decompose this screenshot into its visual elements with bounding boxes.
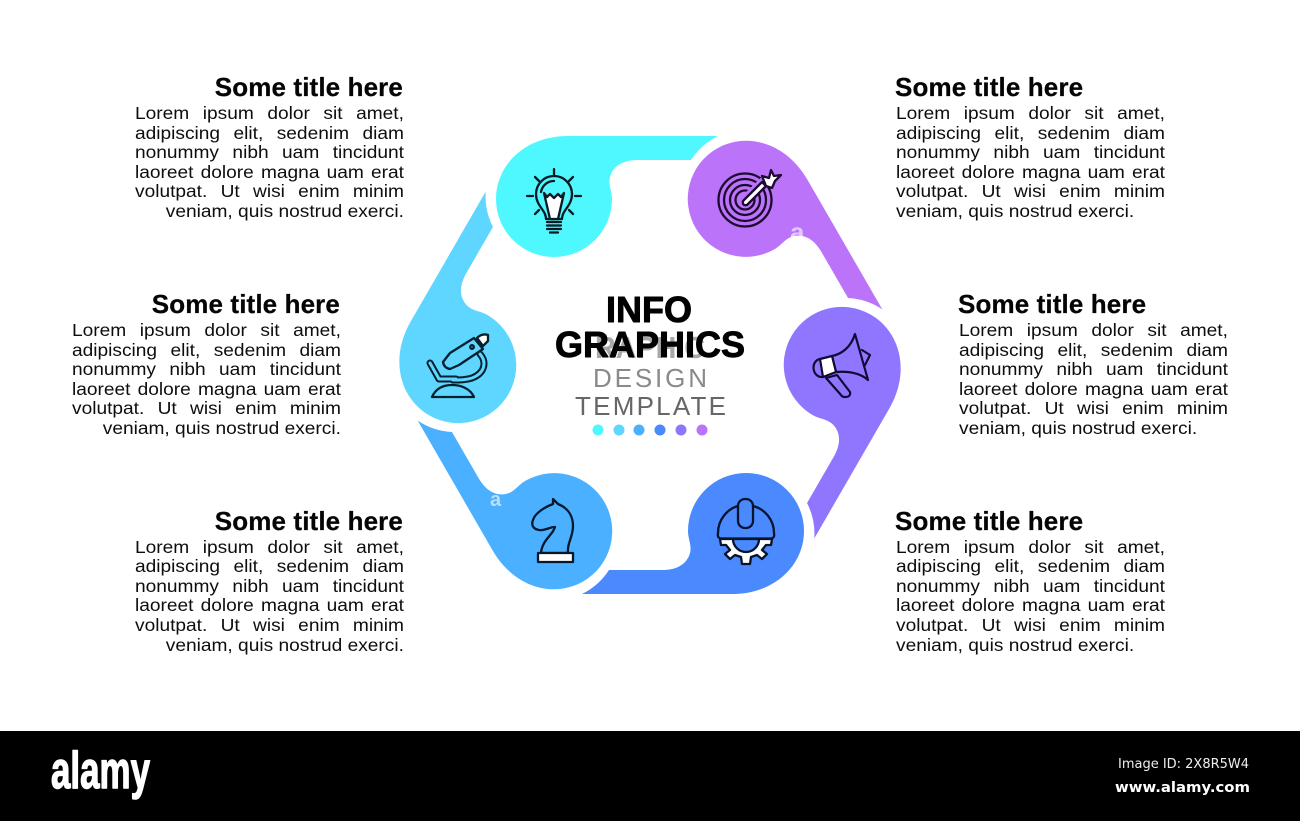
text block: middle left: nonummy nibh uam tincidunt [72,359,341,379]
text block: top left: adipiscing elit, sedenim diam [135,123,404,143]
text block: top left: Some title here [215,72,403,102]
text block: bottom left: laoreet dolore magna uam erat [135,595,404,615]
text block: middle right: Some title here [958,289,1146,319]
text block: bottom left: nonummy nibh uam tincidunt [135,576,404,596]
text block: top left [135,72,404,221]
text block: top left: Lorem ipsum dolor sit amet, [135,103,404,123]
segment: purple right [710,286,925,538]
text block: top left: veniam, quis nostrud exerci. [166,201,404,221]
segment: cyan top-left [496,136,718,257]
icon: megaphone [814,334,870,397]
text block: bottom left: Lorem ipsum dolor sit amet, [135,537,404,557]
alamy logo: alamy [51,742,150,800]
text block: middle left: adipiscing elit, sedenim diam [72,340,341,360]
text block: top right [895,72,1165,221]
watermark glyphs: a [490,489,502,511]
text block: bottom right: adipiscing elit, sedenim diam [896,556,1165,576]
segment: mid blue bottom-left [418,360,633,613]
text block: middle right [958,289,1228,438]
text block: middle left: volutpat. Ut wisi enim minim [72,398,341,418]
text block: top right: laoreet dolore magna uam erat [896,162,1165,182]
segment: blue bottom-right [582,473,804,594]
icon: light bulb [527,169,581,232]
heading: INFO GRAPHICS [555,289,745,365]
text block: middle right: veniam, quis nostrud exerci. [959,418,1197,438]
text block: top right: veniam, quis nostrud exerci. [896,201,1134,221]
icon: target with arrow [718,170,781,226]
watermark glyphs [490,217,805,511]
ghost watermark word: RAPHIC [595,330,705,365]
text block: middle right: laoreet dolore magna uam erat [959,379,1228,399]
text block: middle right: adipiscing elit, sedenim diam [959,340,1228,360]
icon: chess knight [532,499,573,562]
text block: bottom right: nonummy nibh uam tincidunt [896,576,1165,596]
text block: bottom right: volutpat. Ut wisi enim minim [896,615,1165,635]
text block: bottom right: laoreet dolore magna uam erat [896,595,1165,615]
website: www.alamy.com [1115,780,1250,796]
text block: top right: nonummy nibh uam tincidunt [896,142,1165,162]
text block: bottom right: Lorem ipsum dolor sit amet, [896,537,1165,557]
subheading: DESIGN TEMPLATE [575,363,726,421]
text block: top right: volutpat. Ut wisi enim minim [896,181,1165,201]
text block: middle left: veniam, quis nostrud exerci. [103,418,341,438]
text block: middle right: Lorem ipsum dolor sit amet, [959,320,1228,340]
text block: bottom left: veniam, quis nostrud exerci. [166,635,404,655]
segment: violet top-right [667,117,882,370]
text block: middle left [72,289,341,438]
subheading: DESIGN TEMPLATE: TEMPLATE [575,391,726,421]
subheading: DESIGN TEMPLATE: DESIGN [593,363,707,393]
text block: middle left: Lorem ipsum dolor sit amet, [72,320,341,340]
text block: bottom left: adipiscing elit, sedenim diam [135,556,404,576]
text block: bottom right [895,506,1165,655]
watermark glyphs: a [790,217,805,247]
icon: microscope [430,334,488,397]
text block: middle left: laoreet dolore magna uam erat [72,379,341,399]
heading: INFO GRAPHICS: INFO [606,289,692,330]
text block: bottom right: veniam, quis nostrud exerci. [896,635,1134,655]
footer bar [0,731,1300,821]
text block: bottom left [135,506,404,655]
text block: middle left: Some title here [152,289,340,319]
text block: top left: nonummy nibh uam tincidunt [135,142,404,162]
image id: Image ID: 2X8R5W4 [1118,756,1249,772]
icon: hard hat with gear [718,499,774,564]
text block: middle right: nonummy nibh uam tincidunt [959,359,1228,379]
text block: bottom left: Some title here [215,506,403,536]
text block: top right: adipiscing elit, sedenim diam [896,123,1165,143]
text block: bottom left: volutpat. Ut wisi enim minim [135,615,404,635]
colour dots [592,424,708,436]
text block: top left: laoreet dolore magna uam erat [135,162,404,182]
text block: middle right: volutpat. Ut wisi enim minim [959,398,1228,418]
text block: top left: volutpat. Ut wisi enim minim [135,181,404,201]
center title [555,289,745,436]
text block: top right: Some title here [895,72,1083,102]
text block: bottom right: Some title here [895,506,1083,536]
heading: INFO GRAPHICS: GRAPHICS [555,324,745,365]
segment: light blue left [375,192,590,444]
text block: top right: Lorem ipsum dolor sit amet, [896,103,1165,123]
